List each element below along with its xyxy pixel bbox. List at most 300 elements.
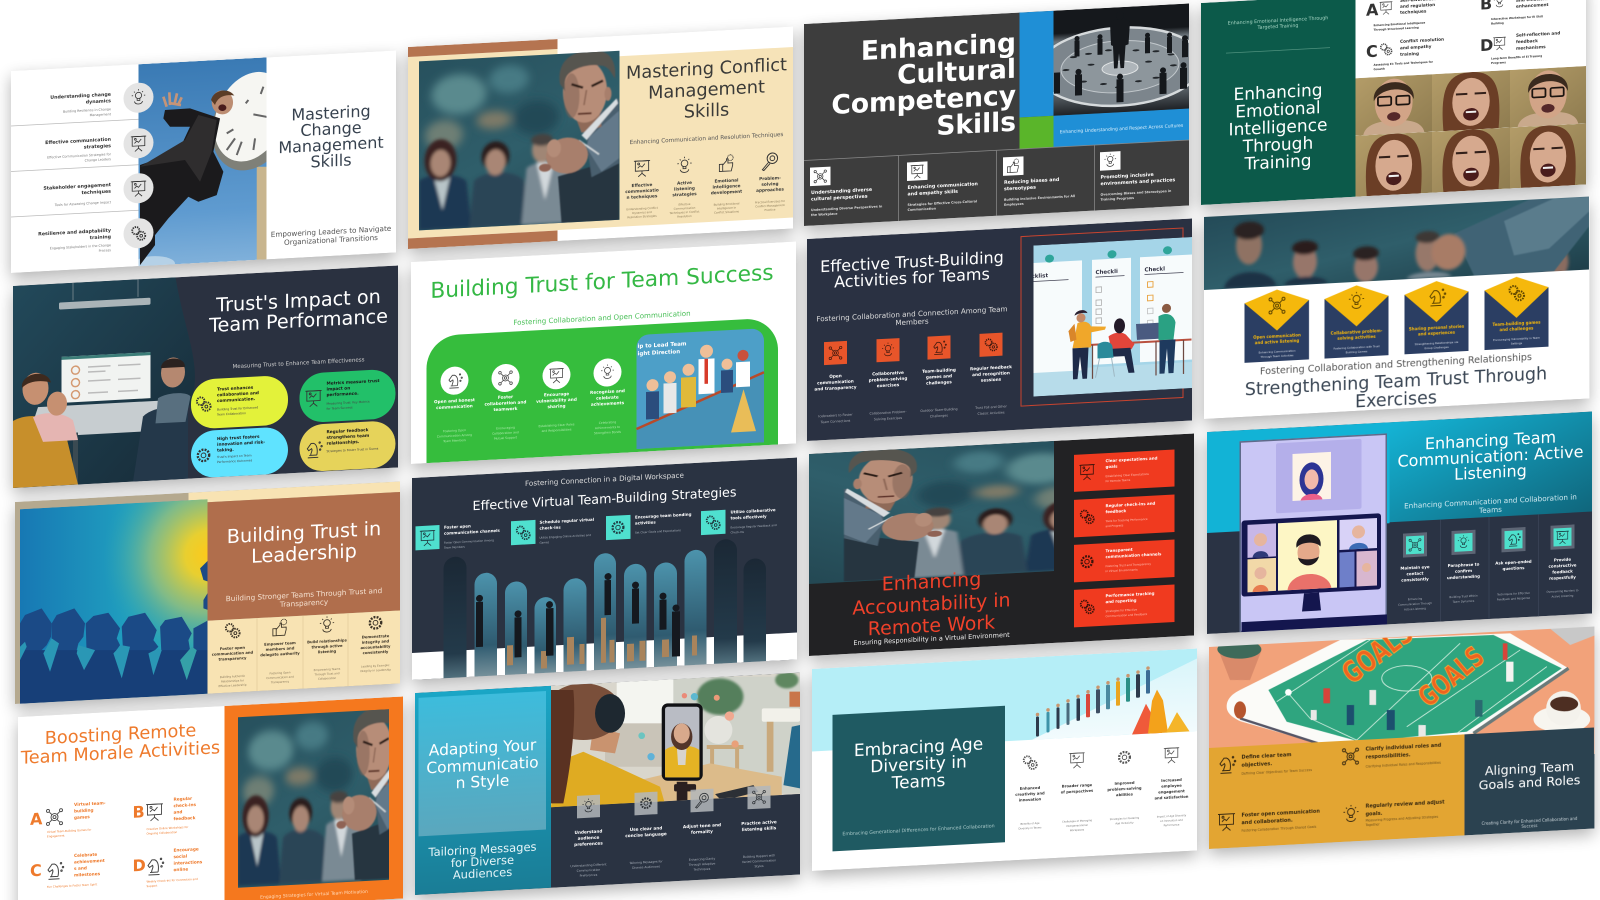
columns: trust behaviours: Establishing Clear Roles — [539, 422, 575, 428]
columns: trust behaviours: communication — [436, 403, 473, 411]
columns: cultural competency topics: Enhancing communication — [907, 181, 978, 191]
photo: leader on a circular stage — [1054, 4, 1189, 116]
columns: conflict skills: strategies — [672, 191, 697, 198]
columns: leadership behaviours: transparency — [218, 656, 247, 662]
columns: active listening skills: confirm — [1455, 568, 1472, 574]
columns: age diversity benefits: Performance — [1164, 822, 1180, 827]
columns: active listening skills: Paraphrase to — [1448, 561, 1480, 568]
columns: age diversity benefits: Impact of Age Diversity — [1157, 813, 1187, 819]
columns: trust-building activities: Icebreakers to Foster — [818, 413, 853, 418]
list: A to D training topics: mechanisms — [1516, 44, 1546, 52]
pill cards: trust metrics: taking. — [217, 447, 234, 454]
list: A to D morale activities: C — [30, 861, 42, 880]
title: Skills — [684, 100, 729, 123]
columns: trust-building activities: Outdoor Team-Building — [920, 407, 958, 413]
list: A to D morale activities: Creative Online Workshops for — [146, 825, 189, 831]
pill cards: trust metrics: Trust enhances — [217, 385, 254, 393]
cards: accountability practices: Fostering Trust and Transparency — [1106, 562, 1151, 568]
columns: leadership behaviours: Foster open — [220, 646, 245, 651]
subtitle: Success — [1521, 823, 1538, 829]
list: four change management topics: training — [90, 234, 111, 241]
list: A to D training topics: A — [1366, 0, 1379, 20]
columns: active listening skills: constructive — [1548, 562, 1577, 569]
panel: Building Trust in Leadership slide — [15, 482, 400, 720]
columns: leadership behaviours: Collaboration — [318, 676, 336, 681]
cards: four trust exercises: Group Challenges — [1424, 345, 1449, 350]
cards: four trust exercises: and experiences — [1418, 330, 1456, 337]
list: A to D training topics: Conflict resolution — [1400, 37, 1444, 45]
title: Teams — [891, 771, 946, 794]
columns: cultural competency topics — [810, 148, 1175, 217]
columns: trust behaviours: Collaboration and — [492, 430, 519, 436]
columns: age diversity benefits: abilities — [1116, 792, 1134, 797]
list: A to D morale activities — [30, 795, 203, 894]
columns: conflict skills: approaches — [756, 186, 784, 194]
columns: cultural competency topics: Building Inclusive Environments for All — [1004, 194, 1075, 202]
list: A to D training topics: D — [1480, 35, 1493, 55]
columns: communication adaptations: listening skills — [742, 825, 777, 833]
illustration: football field on a tablet with GOALS lettering: GOALS — [1411, 640, 1491, 714]
columns: age diversity benefits: of perspectives — [1061, 789, 1094, 795]
columns: communication adaptations: Techniques — [693, 867, 711, 872]
columns: trust behaviours: Achievements to — [595, 425, 620, 430]
panel: Adapting Your Communication Style slide — [415, 658, 800, 895]
list: four change management topics: dynamics — [86, 98, 111, 106]
pill cards: trust metrics: collaboration and — [217, 390, 259, 398]
cards: four trust exercises: and challenges — [1500, 325, 1534, 332]
title: Aligning Team — [1485, 760, 1574, 779]
list: four change management topics: strategies — [84, 143, 111, 151]
subtitle: Audiences — [453, 865, 512, 882]
columns: virtual strategies: tools effectively — [730, 514, 767, 521]
cards: accountability practices: and reporting — [1106, 598, 1137, 604]
columns: cultural competency topics: environments and practices — [1100, 177, 1175, 187]
title: Building Trust for Team Success — [430, 261, 774, 304]
columns: active listening skills: Enhancing — [1408, 597, 1422, 601]
columns: communication adaptations: Adjust tone and — [683, 822, 721, 830]
columns: trust behaviours — [434, 358, 625, 444]
columns: active listening skills: Maintain eye — [1400, 564, 1430, 571]
subtitle: Enhancing Emotional Intelligence Through — [1228, 15, 1328, 27]
pill cards: trust metrics: communication. — [217, 396, 256, 404]
illustration: rising line of people and peaks — [1032, 659, 1197, 740]
columns: trust behaviours: Team Members — [442, 438, 466, 443]
columns: trust behaviours: Strengthen Bonds — [594, 430, 621, 435]
illustration: checklists and a team at a desk — [1034, 237, 1192, 396]
columns: active listening skills: Ask open-ended — [1495, 559, 1532, 566]
title: Diversity in — [870, 752, 967, 777]
columns: leadership behaviours: Through Trust and — [314, 671, 340, 677]
list: goals and roles actions: Define clear team — [1242, 752, 1291, 761]
pill cards: trust metrics: Performance Outcomes — [217, 458, 253, 464]
list: A to D training topics: C — [1366, 42, 1378, 61]
columns: trust-building activities: and recognition — [972, 370, 1010, 378]
list: four change management topics: Stakeholder engagement — [43, 182, 112, 192]
columns: active listening skills: Communication Through — [1398, 601, 1432, 607]
columns: age diversity benefits: innovation — [1019, 797, 1042, 802]
list: A to D morale activities: games — [74, 815, 90, 821]
panel: Strengthening Team Trust Through Exercises slide — [1204, 197, 1589, 420]
columns: cultural competency topics: Promoting inclusive — [1100, 172, 1154, 181]
list: A to D morale activities: s and — [74, 865, 87, 872]
cards: accountability practices: Establishing Clear Expectations — [1106, 472, 1149, 478]
columns: active listening skills: questions — [1502, 565, 1525, 571]
list: four change management topics: Resilience and adaptability — [38, 228, 112, 238]
illustration: team on a tilted board: ight Direction — [638, 349, 680, 357]
columns: leadership behaviours: communication and — [212, 651, 254, 657]
subtitle: Fostering Collaboration and Strengthening Relationships — [1260, 352, 1532, 378]
columns: leadership behaviours: accountability — [361, 644, 391, 650]
panel: Mastering Conflict Management Skills slide — [408, 26, 793, 249]
columns: leadership behaviours: Build relationships — [307, 638, 348, 644]
columns: cultural competency topics: the Workplace — [811, 212, 838, 217]
cards: accountability practices: and Progress — [1106, 523, 1124, 528]
columns: trust-building activities: sessions — [981, 377, 1002, 384]
columns: active listening skills: Techniques for Effective — [1496, 591, 1530, 597]
list: goals and roles actions — [1218, 742, 1445, 835]
columns: trust-building activities: Open — [829, 373, 842, 380]
columns: conflict skills: Practical Exercises for — [755, 199, 786, 205]
title: Management — [278, 133, 384, 157]
columns: leadership behaviours: Transparency — [270, 679, 290, 684]
columns: conflict skills: Active — [677, 180, 692, 187]
list: A to D training topics: techniques — [1400, 8, 1427, 16]
list: goals and roles actions: Together — [1365, 822, 1380, 827]
subtitle: for Diverse — [451, 853, 514, 870]
cards: accountability practices: in Virtual Environments — [1106, 567, 1138, 573]
panel: Aligning Team Goals and Roles slide — [1209, 596, 1600, 849]
columns: communication adaptations: concise language — [625, 831, 667, 839]
subtitle: Empowering Leaders to Navigate — [271, 224, 392, 239]
columns: active listening skills: Provide — [1554, 557, 1571, 563]
title: Adapting Your — [429, 736, 537, 760]
columns: trust-building activities: Team-building — [922, 367, 956, 375]
cards: four trust exercises: Settings — [1511, 341, 1523, 346]
columns: communication adaptations — [570, 785, 777, 878]
columns: leadership behaviours: Demonstrate — [362, 634, 390, 640]
list: four change management topics: Effective Communication Strategies for — [47, 152, 112, 160]
subtitle: Ensuring Responsibility in a Virtual Environment — [853, 631, 1010, 647]
columns: cultural competency topics: and empathy skills — [907, 189, 958, 197]
list: A to D morale activities: Support — [146, 884, 158, 888]
illustration: video call on a monitor — [1240, 433, 1387, 632]
columns: conflict skills: Understanding Conflict — [626, 206, 659, 211]
columns: conflict skills: Dynamics and — [632, 210, 652, 215]
columns: conflict skills: intelligence — [712, 183, 741, 191]
list: A to D training topics: Through Structured Learning — [1374, 25, 1419, 32]
green panel — [426, 317, 778, 463]
list: A to D training topics: and empathy — [1400, 44, 1432, 51]
cards: four trust exercises: Through Team Activities — [1260, 353, 1294, 359]
cards: accountability practices: feedback — [1106, 508, 1126, 514]
columns: leadership behaviours: listening — [318, 649, 337, 654]
list: A to D training topics: Building — [1491, 21, 1504, 26]
title: Team Performance — [208, 305, 388, 337]
columns: age diversity benefits: and satisfaction — [1155, 795, 1189, 801]
title: Strengthening Team Trust Through — [1245, 364, 1547, 400]
title: Skills — [310, 150, 352, 172]
columns: conflict skills: listening — [674, 185, 695, 193]
subtitle: Tailoring Messages — [427, 840, 537, 859]
columns: conflict skills: development — [711, 189, 742, 196]
title: Building Trust in — [227, 517, 381, 548]
columns: conflict skills: Practice — [765, 207, 776, 212]
columns: leadership behaviours: Building Authentic — [220, 674, 246, 679]
list: goals and roles actions: Defining Clear Objectives for Team Success — [1242, 768, 1312, 776]
list: A to D morale activities: A — [30, 809, 43, 829]
columns: virtual strategies: Utilize collaborative — [730, 507, 776, 515]
photo grid: expressive faces — [1356, 66, 1586, 197]
list: A to D training topics: Long-term Benefits of EI Training — [1491, 54, 1542, 61]
panel: Enhancing Accountability in Remote Work slide — [722, 425, 1212, 661]
columns: leadership behaviours: Leading by Example: — [361, 663, 390, 669]
columns: communication adaptations: Styles — [754, 864, 764, 868]
columns: active listening skills: Team Dynamics — [1452, 599, 1475, 604]
cards: four trust exercises: Collaborative problem- — [1331, 328, 1383, 336]
cards: four trust exercises: Open communication — [1253, 332, 1301, 340]
cards: four trust exercises: Sharing personal stories — [1409, 324, 1465, 332]
columns: active listening skills: respectfully — [1549, 574, 1576, 581]
panel: Mastering Change Management Skills slide — [11, 46, 396, 287]
title: Communicatio — [426, 753, 539, 777]
columns: active listening skills — [1398, 526, 1579, 612]
columns: conflict skills: Effective — [679, 202, 691, 207]
cards: accountability practices: communication channels — [1106, 551, 1162, 559]
columns: communication adaptations: audience — [578, 835, 599, 842]
pill cards: trust metrics: Building Trust for Enhanced — [217, 405, 258, 412]
cards: four trust exercises: Enhancing Communication — [1259, 349, 1296, 355]
pill cards: trust metrics: Strategies to Foster Trust in Teams — [326, 447, 379, 453]
columns: active listening skills: Overcoming Barriers to — [1547, 588, 1579, 594]
list: goals and roles actions: Fostering Collaboration Through Shared Goals — [1242, 825, 1317, 833]
columns: age diversity benefits: Strategies for Fostering — [1110, 816, 1140, 821]
pill cards: trust metrics — [191, 369, 396, 479]
columns: communication adaptations: preferences — [574, 840, 603, 848]
columns: trust-building activities: problem-solving — [869, 376, 907, 384]
columns: trust behaviours: vulnerability and — [536, 397, 577, 405]
cards: accountability practices: Transparent — [1106, 547, 1133, 553]
columns: trust-building activities: Trust Fall and Other — [974, 404, 1007, 410]
list: goals and roles actions: responsibilities. — [1366, 752, 1411, 761]
title: Mastering Conflict — [626, 55, 787, 84]
columns: virtual strategies: communication channels — [444, 528, 501, 536]
list: goals and roles actions: goals. — [1366, 811, 1383, 818]
list: A to D training topics: Growth — [1374, 67, 1385, 71]
list: A to D training topics: and regulation — [1400, 2, 1435, 10]
columns: age diversity benefits: on Innovation and — [1160, 818, 1183, 823]
panel: Enhancing Cultural Competency Skills slide — [804, 3, 1202, 226]
list: goals and roles actions: Regularly review and adjust — [1366, 799, 1445, 810]
columns: virtual strategies: activities — [635, 519, 656, 526]
list: A to D morale activities: D — [132, 856, 146, 875]
title: Remote Work — [868, 612, 995, 640]
columns: age diversity benefits: employee — [1161, 784, 1182, 789]
list: four change management topics: Process — [99, 248, 111, 253]
columns: age diversity benefits: Benefits of Age — [1020, 821, 1040, 826]
illustration: football field on a tablet with GOALS lettering: GOALS — [1336, 616, 1420, 691]
columns: trust-building activities: communication — [817, 379, 854, 386]
illustration: checklists and a team at a desk: cklist — [1032, 273, 1048, 280]
pill cards: trust metrics: Measuring Trust: Key Metrics — [326, 399, 370, 406]
columns: conflict skills: Building Emotional — [714, 201, 740, 207]
panel: Effective Trust-Building Activities slide — [807, 219, 1192, 441]
columns: conflict skills: Communication — [674, 206, 696, 211]
title panel — [832, 706, 1005, 851]
list: A to D morale activities: building — [74, 807, 94, 815]
columns: cultural competency topics: Employees — [1004, 202, 1024, 207]
illustration: team on a tilted board — [636, 328, 764, 449]
title: Effective Trust-Building — [820, 248, 1004, 276]
list: A to D training topics: Interactive Workshops for EI Skill — [1491, 14, 1543, 21]
columns: conflict skills: Conflict Management — [755, 203, 786, 209]
columns: age diversity benefits: Enhanced — [1020, 786, 1041, 791]
pill cards: trust metrics: innovation and risk- — [217, 439, 265, 448]
photo: businessman leaping at a clock — [138, 58, 266, 266]
list: A to D morale activities: Virtual team- — [74, 800, 106, 808]
columns: trust-building activities: games and — [926, 373, 952, 381]
columns: virtual strategies: Schedule regular virtual — [540, 517, 595, 525]
list: four change management topics: Management — [90, 112, 112, 117]
cards: four trust exercises: Building Games — [1346, 349, 1368, 354]
pill cards: trust metrics: strengthens team — [326, 433, 370, 441]
columns: leadership behaviours: members and — [266, 646, 295, 652]
cards: accountability practices: goals — [1106, 464, 1118, 469]
title: Leadership — [251, 539, 357, 568]
pill cards: trust metrics: relationships. — [326, 439, 360, 447]
columns: communication adaptations: Preferences — [580, 873, 598, 878]
columns: active listening skills: contact — [1407, 570, 1424, 576]
subtitle: Targeted Training — [1257, 23, 1298, 31]
list: four change management topics: Effective communication — [45, 137, 112, 146]
columns: trust behaviours: collaboration and — [485, 399, 526, 408]
columns: leadership behaviours: through active — [311, 644, 343, 649]
cards: four trust exercises: solving activities — [1337, 334, 1376, 341]
columns: communication adaptations: Through Adaptive — [688, 862, 715, 867]
columns: conflict skills: Conflict Situations — [714, 209, 740, 215]
title: Management — [648, 78, 765, 104]
title: Mastering — [291, 101, 371, 125]
columns: virtual strategies: Utilize Engaging Online Activities and — [540, 533, 591, 540]
columns: trust behaviours: Mutual Support — [494, 435, 518, 441]
list: A to D morale activities: Virtual Team-Building Games for — [47, 828, 92, 834]
columns: trust behaviours: Communication Among — [437, 433, 472, 439]
photo: woman recording herself on a phone — [551, 672, 800, 808]
title: Enhancing — [861, 28, 1016, 67]
columns: trust-building activities: Regular feedback — [970, 364, 1012, 372]
columns: leadership behaviours: Relationships for — [221, 678, 245, 684]
list: A to D morale activities: achievement — [74, 858, 105, 866]
columns: trust behaviours: Encourage — [544, 391, 569, 398]
list: A to D training topics: Programs — [1491, 60, 1506, 65]
subtitle: Building Stronger Teams Through Trust and — [226, 586, 382, 603]
title: Exercises — [1355, 388, 1437, 412]
subtitle: Members — [895, 317, 929, 327]
list: A to D training topics: Assessing EI: Tools and Techniques for — [1374, 60, 1434, 67]
list: A to D training topics: feedback — [1516, 38, 1538, 45]
columns: age diversity benefits: Increased — [1161, 778, 1182, 783]
subtitle: Organizational Transitions — [284, 233, 378, 247]
columns: conflict skills: Problem- — [759, 175, 781, 182]
pill cards: trust metrics: Team Collaboration — [216, 411, 246, 417]
panel: Enhancing Emotional Intelligence Through Training slide — [1201, 0, 1586, 205]
columns: virtual strategies — [416, 507, 777, 551]
pill cards: trust metrics: for Team Success — [326, 405, 353, 411]
columns: leadership behaviours: Empowering Teams — [314, 667, 341, 672]
columns: active listening skills: Active Listening — [1404, 606, 1426, 612]
illustration: silhouettes before a glowing gradient — [20, 499, 208, 704]
cards: accountability practices: for Remote Teams — [1106, 478, 1131, 483]
cards: accountability practices: Communication and Feedback — [1106, 612, 1148, 618]
columns: age diversity benefits: problem-solving — [1107, 786, 1142, 792]
title: Goals and Roles — [1479, 773, 1581, 794]
columns: trust-building activities: Challenges — [930, 413, 948, 418]
columns: age diversity benefits: engagement — [1158, 789, 1185, 795]
columns: age diversity benefits: Challenges of Managing — [1062, 818, 1092, 824]
pill cards: trust metrics: Regular feedback — [326, 427, 369, 435]
title: Listening — [1454, 461, 1527, 484]
columns: leadership behaviours: Fostering Open — [270, 670, 291, 675]
panel: Trust's Impact on Team Performance slide — [13, 266, 398, 488]
columns: conflict skills: Emotional — [715, 177, 739, 185]
columns: age diversity benefits: Age Inclusivity — [1115, 820, 1134, 825]
list: A to D training topics: training — [1400, 51, 1419, 58]
columns: cultural competency topics: Communication — [907, 206, 937, 212]
columns: trust behaviours: Fostering Open — [443, 428, 466, 433]
list: A to D morale activities: interactions — [174, 859, 203, 867]
columns: active listening skills: feedback — [1552, 569, 1573, 575]
list: A to D training topics: Self-reflection and — [1516, 30, 1560, 39]
list: four change management topics: Tools for Assessing Change Impact — [54, 200, 112, 207]
columns: active listening skills: Building Trust Within — [1449, 594, 1478, 599]
title: Through — [1242, 134, 1313, 157]
columns: virtual strategies: Set Clear Goals and Expectations — [635, 528, 681, 535]
cards: four trust exercises: Strengthening Relationships via — [1415, 340, 1459, 346]
list: A to D morale activities: Engagement — [47, 833, 65, 838]
columns: conflict skills: solving — [761, 181, 779, 188]
columns: conflict skills: Resolution Strategies — [627, 214, 657, 219]
columns: cultural competency topics: Strategies for Effective Cross-Cultural — [907, 199, 977, 207]
list: A to D training topics: Enhancing Emotional Intelligence — [1374, 21, 1425, 27]
columns: virtual strategies: Foster Open Communication Among — [444, 538, 494, 545]
columns: communication adaptations: Use clear and — [630, 825, 662, 833]
columns: virtual strategies: Foster open — [444, 523, 471, 530]
cards: accountability practices: Performance tracking — [1106, 591, 1155, 598]
columns: leadership behaviours: integrity and — [362, 639, 390, 645]
list: A to D morale activities: Fun Challenges to Foster Team Spirit — [47, 882, 98, 889]
columns: conflict skills: Effective — [632, 182, 653, 189]
cards: four trust exercises — [1244, 275, 1548, 363]
columns: active listening skills: consistently — [1401, 576, 1429, 583]
subtitle: Creating Clarity for Enhanced Collaboration and — [1482, 816, 1578, 826]
columns: leadership behaviours — [212, 613, 391, 689]
columns: cultural competency topics: cultural perspectives — [811, 194, 868, 203]
panel: Enhancing Team Communication Active Listening slide — [1207, 412, 1592, 634]
columns: trust behaviours: achievements — [591, 400, 625, 408]
columns: virtual strategies: check-ins — [540, 525, 561, 531]
columns: trust-building activities: Collaborative — [872, 370, 904, 378]
list: A to D morale activities: check-ins — [174, 802, 197, 809]
illustration: checklists and a team at a desk: Checkli — [1096, 269, 1118, 276]
title: Enhancing — [1233, 81, 1323, 105]
columns: communication adaptations: Diverse Audiences — [632, 864, 660, 870]
cards: accountability practices: Regular check-ins and — [1106, 501, 1156, 508]
title: n Style — [456, 771, 509, 792]
columns: communication adaptations: Understanding Different — [570, 862, 607, 868]
cards: accountability practices — [1074, 450, 1174, 627]
columns: communication adaptations: Building Rapport with — [743, 853, 775, 859]
cards: four trust exercises: Encouraging Vulnerability in Team — [1493, 336, 1540, 342]
columns: trust behaviours: celebrate — [596, 394, 619, 402]
